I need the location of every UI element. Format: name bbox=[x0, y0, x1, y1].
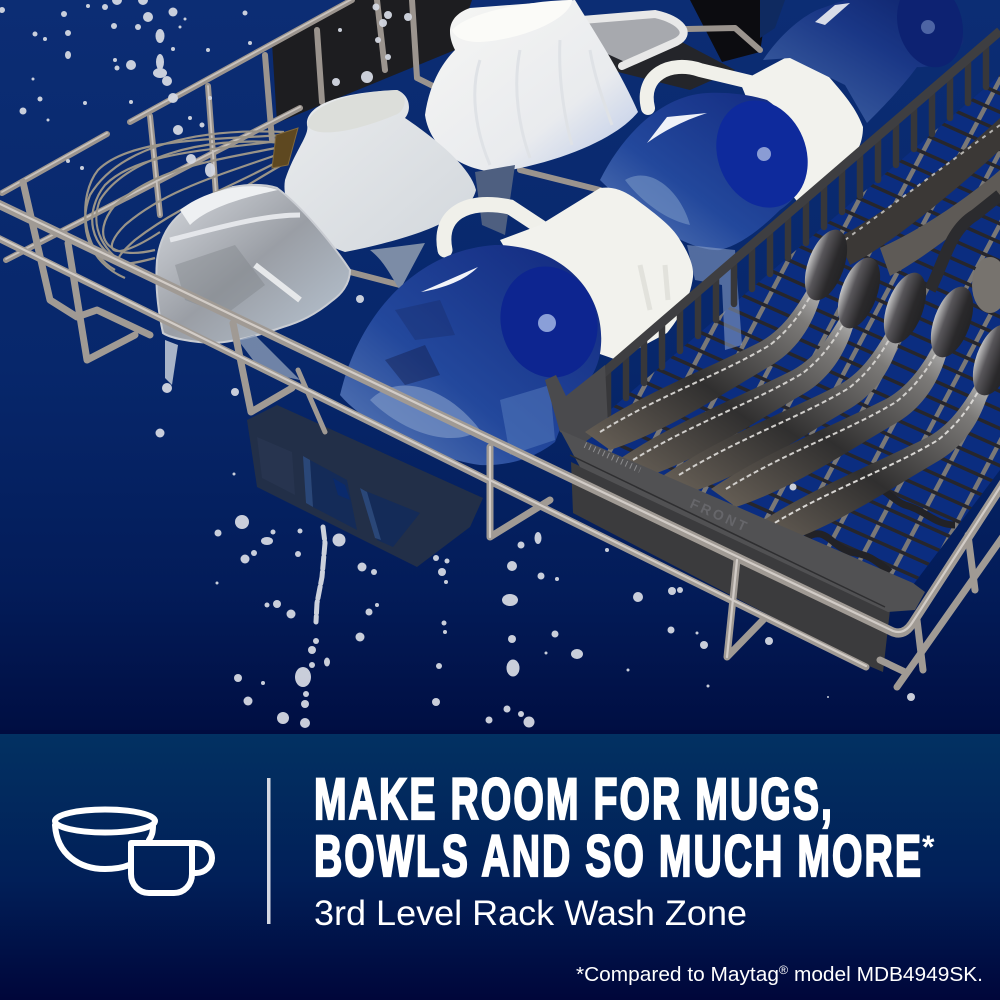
water splash behind the tray bbox=[687, 245, 742, 350]
headline: * bbox=[922, 829, 935, 865]
spoon 4 bbox=[711, 281, 982, 507]
blue glass bowl, middle bbox=[600, 87, 823, 250]
spoon 5 bbox=[753, 319, 1000, 545]
whisk handle bbox=[272, 128, 298, 168]
upper rack wires bbox=[2, 0, 760, 285]
white mug, back bbox=[647, 57, 863, 205]
front rack wires bbox=[0, 182, 1000, 687]
dark back panel of the dishwasher rack bbox=[272, 0, 785, 123]
spoon 2 bbox=[618, 252, 889, 478]
large dark utensils, upper right bbox=[838, 118, 1000, 313]
icon: bowl and mug bbox=[55, 810, 212, 893]
cutlery tray back wall with slats bbox=[545, 31, 1000, 442]
blue glass bowl, front bbox=[340, 245, 610, 465]
footnote: model MDB4949SK. bbox=[788, 964, 983, 986]
cutlery tray front wall bbox=[560, 430, 925, 672]
tray end tab bbox=[545, 365, 608, 442]
footnote: *Compared to Maytag bbox=[576, 964, 771, 986]
water drops bbox=[0, 0, 915, 728]
spoon 3 bbox=[664, 267, 935, 493]
divider bbox=[267, 778, 270, 924]
headline: MAKE ROOM FOR MUGS, bbox=[314, 766, 832, 832]
glass dish behind the top bowl bbox=[582, 14, 684, 66]
water below the back bowl bbox=[475, 165, 515, 235]
cutlery tray floor grid bbox=[560, 70, 1000, 590]
photo background bbox=[0, 0, 1000, 734]
headline: BOWLS AND SO MUCH MORE bbox=[314, 823, 921, 889]
whisk bbox=[85, 128, 298, 278]
falling water stream bbox=[316, 527, 325, 622]
dark wave supports bbox=[806, 486, 955, 572]
glass bowl bbox=[156, 185, 350, 385]
bottom caption panel bbox=[0, 730, 1000, 1000]
footnote: ® bbox=[779, 963, 788, 977]
rack clip bbox=[247, 405, 483, 567]
white mug, middle bbox=[444, 188, 693, 360]
embossed tray label: FRONT bbox=[688, 495, 752, 535]
subheading: 3rd Level Rack Wash Zone bbox=[314, 894, 747, 933]
spoon 1 bbox=[585, 224, 856, 450]
white bowl, back bbox=[425, 0, 638, 172]
headline bbox=[314, 766, 935, 889]
blue glass bowl, top right bbox=[763, 0, 972, 123]
white bowl, centre bbox=[284, 90, 476, 290]
